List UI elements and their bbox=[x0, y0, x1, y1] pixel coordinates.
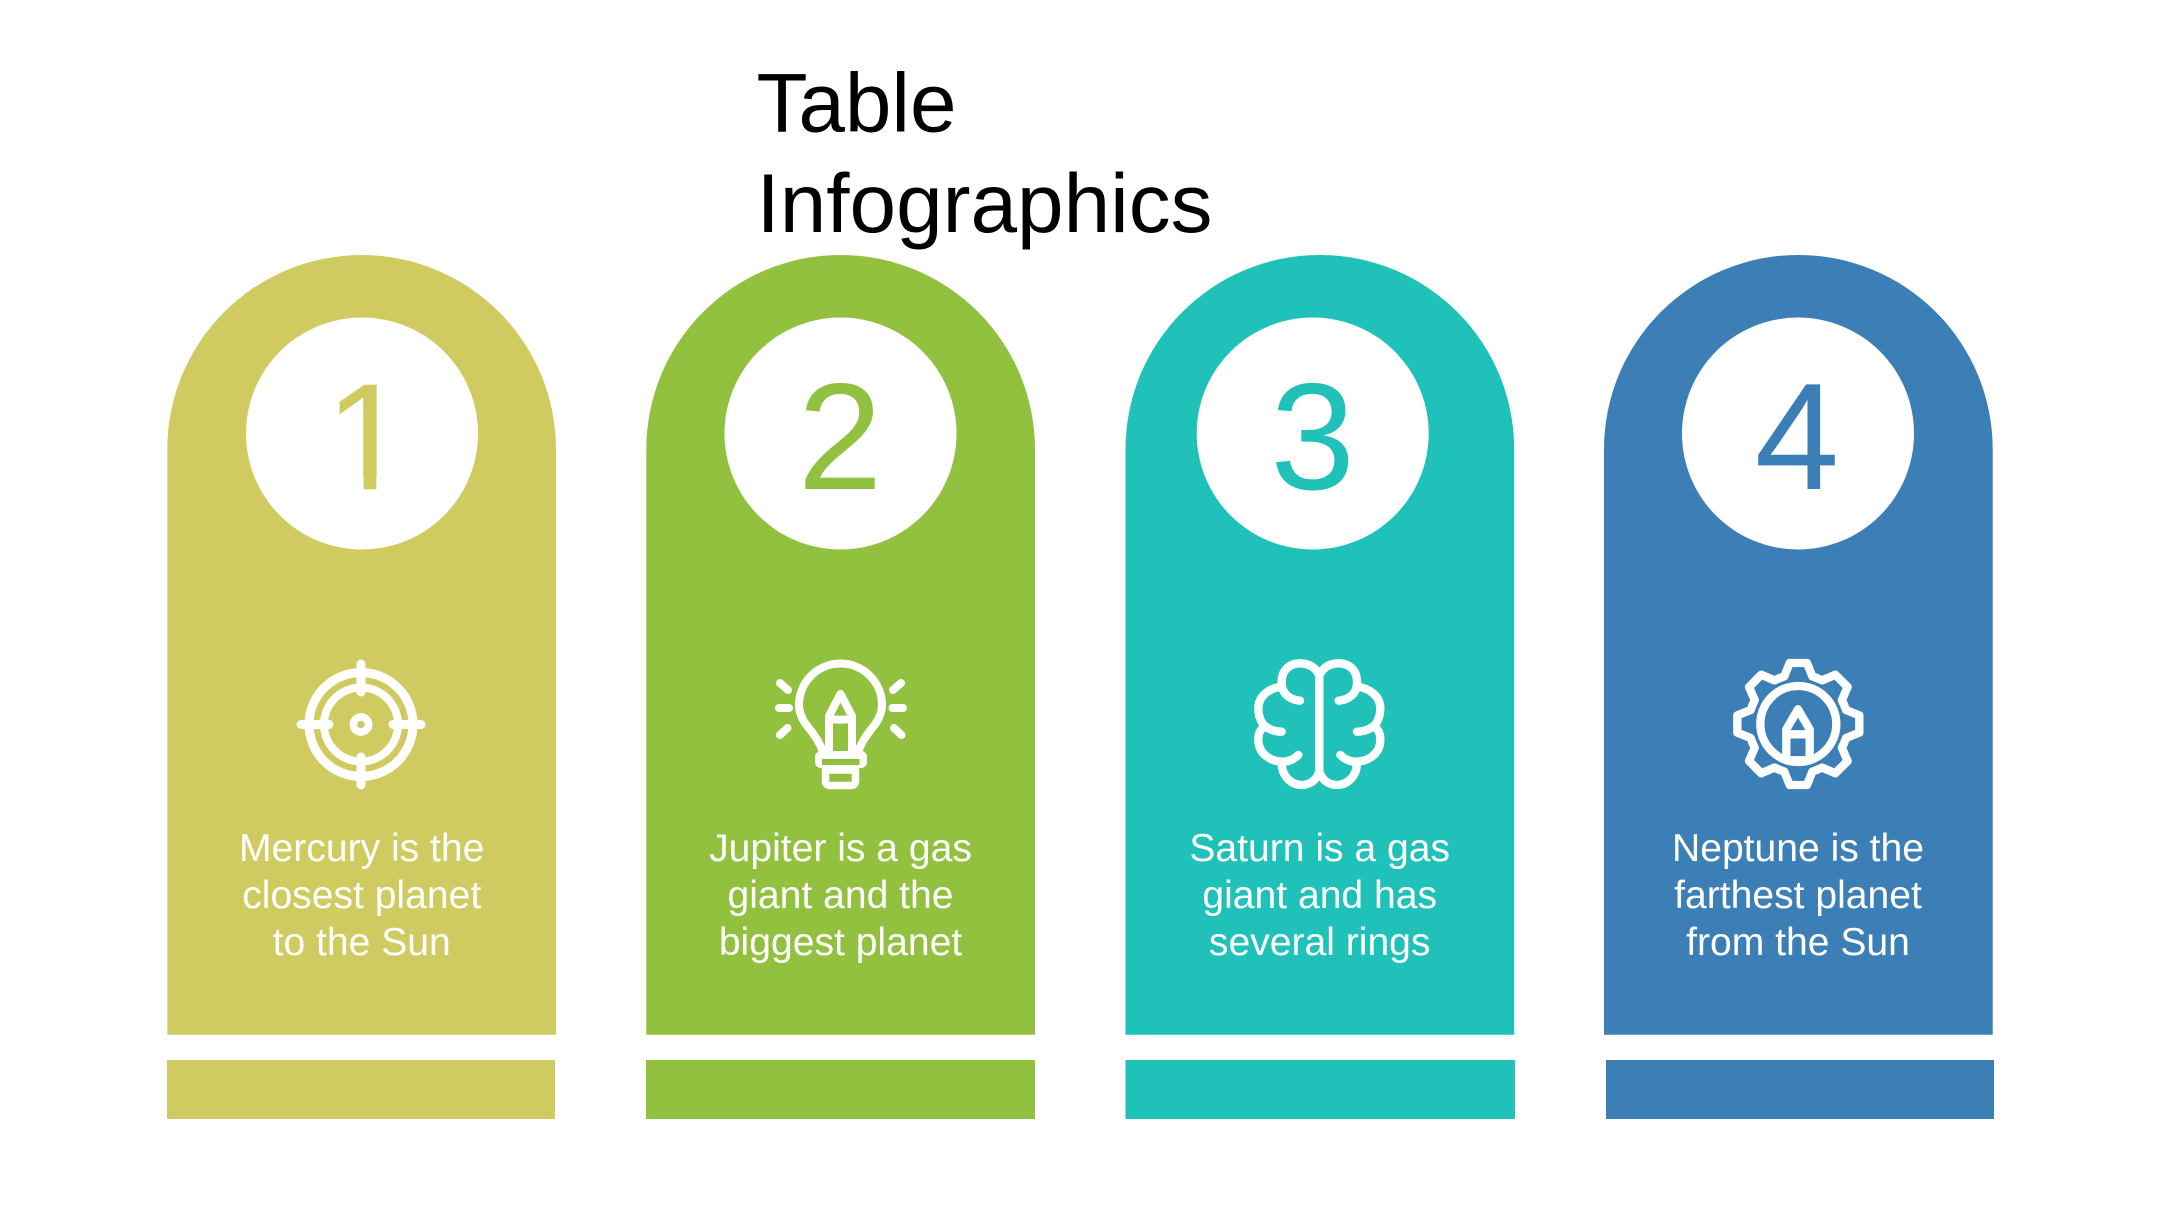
arch card 4 bbox=[1604, 255, 1993, 1035]
text: Jupiter description: giant and the bbox=[728, 874, 953, 917]
icon: target crosshair bbox=[301, 664, 421, 785]
text: Saturn description: Saturn is a gas bbox=[1189, 827, 1450, 870]
text: Mercury description: to the Sun bbox=[273, 921, 451, 964]
text: Mercury description bbox=[239, 827, 484, 964]
text: Jupiter description: biggest planet bbox=[719, 921, 962, 964]
base bar 2 bbox=[646, 1060, 1035, 1119]
number circle 1: 1 bbox=[325, 352, 410, 522]
panel: column 3 Saturn bbox=[1126, 255, 1515, 1119]
number circle 1 bbox=[246, 318, 478, 550]
base bar 1 bbox=[167, 1060, 555, 1119]
number circle 2 bbox=[724, 318, 956, 550]
panel: column 1 Mercury bbox=[167, 255, 556, 1119]
base bar 3 bbox=[1126, 1060, 1515, 1119]
text: Mercury description: Mercury is the bbox=[239, 827, 484, 870]
text: Mercury description: closest planet bbox=[242, 874, 481, 917]
text: Neptune description: Neptune is the bbox=[1672, 827, 1924, 870]
icon: brain bbox=[1258, 663, 1380, 785]
number circle 3: 3 bbox=[1270, 352, 1355, 522]
title bbox=[756, 56, 1212, 250]
text: Jupiter description: Jupiter is a gas bbox=[709, 827, 972, 870]
number circle 2: 2 bbox=[798, 352, 882, 522]
title: Infographics bbox=[756, 156, 1212, 250]
text: Saturn description: several rings bbox=[1209, 921, 1430, 964]
text: Jupiter description bbox=[709, 827, 972, 964]
icon: gear with pencil bbox=[1737, 663, 1859, 785]
arch card 1 bbox=[167, 255, 556, 1035]
panel: column 4 Neptune bbox=[1604, 255, 1994, 1119]
number circle 4: 4 bbox=[1755, 352, 1839, 522]
number circle 4 bbox=[1682, 318, 1914, 550]
text: Saturn description bbox=[1189, 827, 1450, 964]
icon: light bulb with pencil bbox=[779, 664, 903, 786]
title: Table bbox=[756, 56, 957, 150]
text: Neptune description: farthest planet bbox=[1674, 874, 1922, 917]
number circle 3 bbox=[1197, 318, 1429, 550]
text: Saturn description: giant and has bbox=[1202, 874, 1437, 917]
panel: column 2 Jupiter bbox=[646, 255, 1035, 1119]
text: Neptune description: from the Sun bbox=[1686, 921, 1910, 964]
arch card 2 bbox=[646, 255, 1035, 1035]
arch card 3 bbox=[1126, 255, 1514, 1035]
text: Neptune description bbox=[1672, 827, 1924, 964]
base bar 4 bbox=[1606, 1060, 1994, 1119]
